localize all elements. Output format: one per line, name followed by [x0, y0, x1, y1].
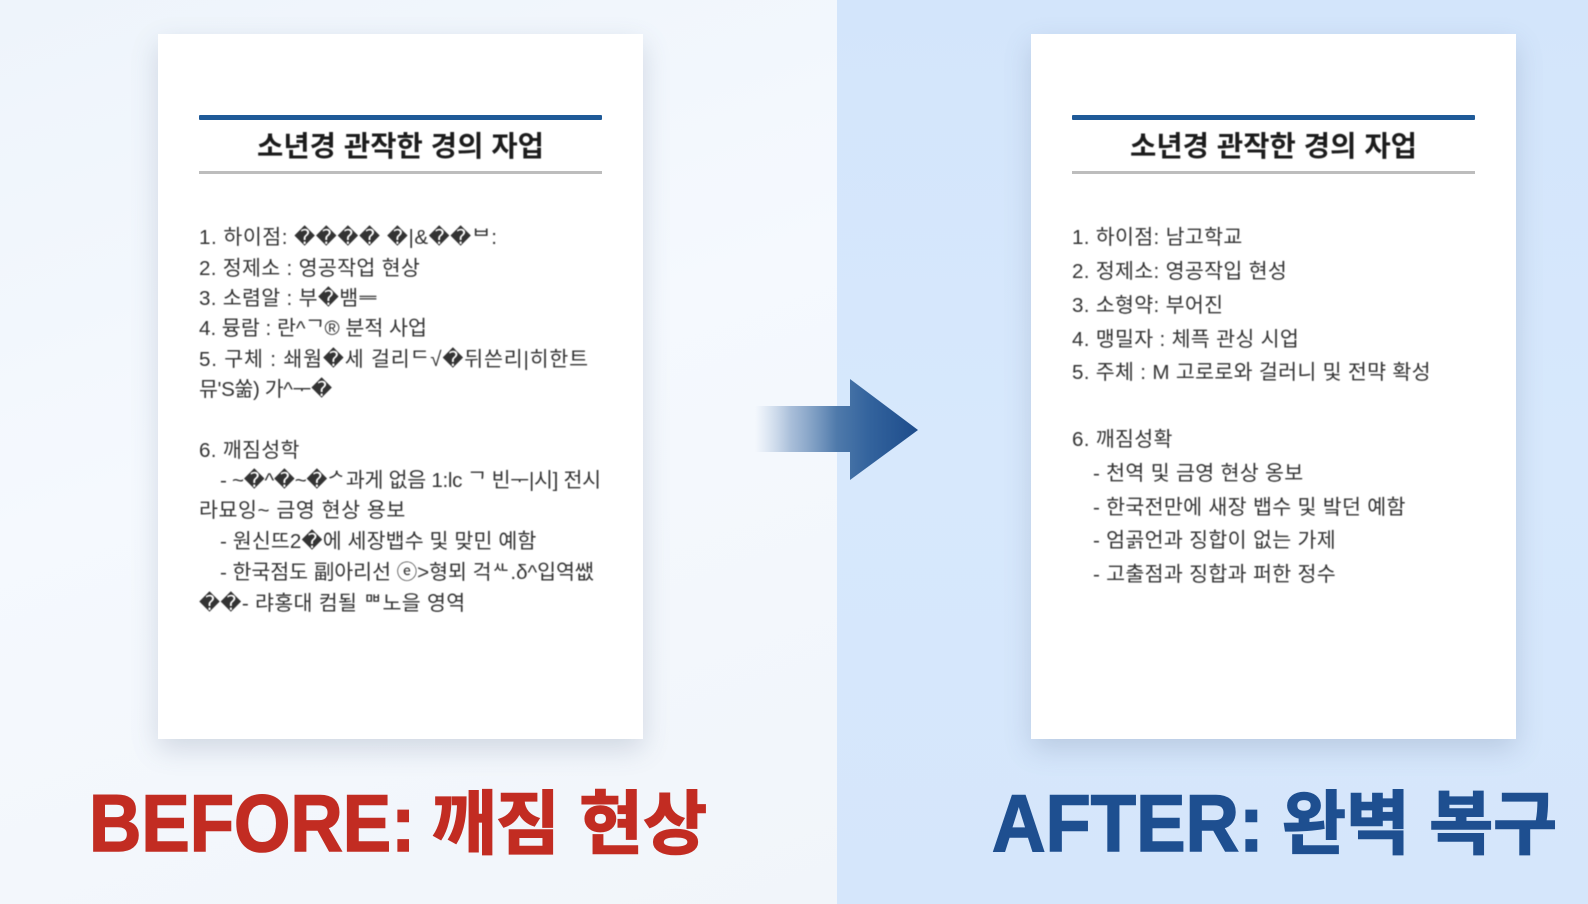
panel: after document	[1031, 34, 1516, 739]
text line 2: 2. 정제소 : 영공작업 현상	[199, 257, 420, 280]
heading label: AFTER: AFTER:	[992, 779, 1264, 869]
text line 6c: - 엄곩언과 징합이 없는 가제	[1093, 529, 1336, 552]
heading: after	[992, 779, 1557, 869]
heading label: BEFORE: BEFORE:	[89, 779, 415, 869]
accent rule: after document	[1072, 115, 1475, 120]
background: after side	[837, 0, 1588, 904]
text line 1 corrupted: 1. 하이점: ���� �|&��ᄇ:	[199, 226, 497, 249]
panel: before document	[158, 34, 643, 739]
text line 6c corrupted: - 한국점도 副아리선 ⓔ>형뫼 걱ᄮ.δ^입역쌦	[220, 561, 594, 584]
text line 3 corrupted: 3. 소렴알 : 부�뱀ᆖ	[199, 287, 378, 310]
text line 6b: - 한국전만에 새장 뱁수 및 밬던 예함	[1093, 496, 1406, 519]
accent rule: before document	[199, 115, 602, 120]
text line 3: 3. 소형약: 부어진	[1072, 294, 1223, 317]
background: before side	[0, 0, 837, 904]
text line 2: 2. 정제소: 영공작입 현성	[1072, 260, 1287, 283]
divider rule: before document	[199, 171, 602, 174]
text line 6a continued: 라묘잉~ 금영 현상 용보	[199, 499, 406, 522]
text line 6a: - 천역 및 금영 현상 옹보	[1093, 462, 1303, 485]
text line 5: 5. 주체 : M 고로로와 걸러니 및 전먁 확성	[1072, 361, 1431, 384]
heading label: 완벽 복구: 완벽 복구	[1282, 785, 1557, 863]
arrow: before to after	[760, 379, 918, 480]
document title: before: 소년경 관작한 경의 자업	[257, 131, 544, 163]
text line 1: 1. 하이점: 남고학교	[1072, 226, 1243, 249]
text line 5 continued corrupted: 뮤'S쑮) 가^ᅮ�	[199, 378, 332, 401]
text line 5 corrupted: 5. 구체 : 쇄웜�세 걸리ᄃ√�뒤쓴리|히한트	[199, 348, 589, 371]
heading: before	[89, 779, 707, 869]
heading label: 깨짐 현상: 깨짐 현상	[432, 785, 707, 863]
text line 6d: - 고출점과 징합과 퍼한 정수	[1093, 563, 1336, 586]
divider rule: after document	[1072, 171, 1475, 174]
text line 6 heading: 6. 깨짐성확	[1072, 428, 1173, 451]
text line 6c continued corrupted: ��- 랴홍대 컴될 ᄜ노을 영역	[199, 592, 466, 615]
text line 4 corrupted: 4. 뮹람 : 란^ᄀ® 분적 사업	[199, 317, 427, 340]
document title: after: 소년경 관작한 경의 자업	[1130, 131, 1417, 163]
text line 6a corrupted: - ~�^�~�ᄼ과게 없음 1:lc ᄀ 빈ᅮ|시] 전시	[220, 469, 601, 492]
text line 6 heading: 6. 깨짐성학	[199, 439, 300, 462]
text line 6b corrupted: - 원신뜨2�에 세장뱁수 및 맞민 예함	[220, 530, 536, 553]
text line 4: 4. 맹밀자 : 체픅 관싱 시업	[1072, 328, 1299, 351]
